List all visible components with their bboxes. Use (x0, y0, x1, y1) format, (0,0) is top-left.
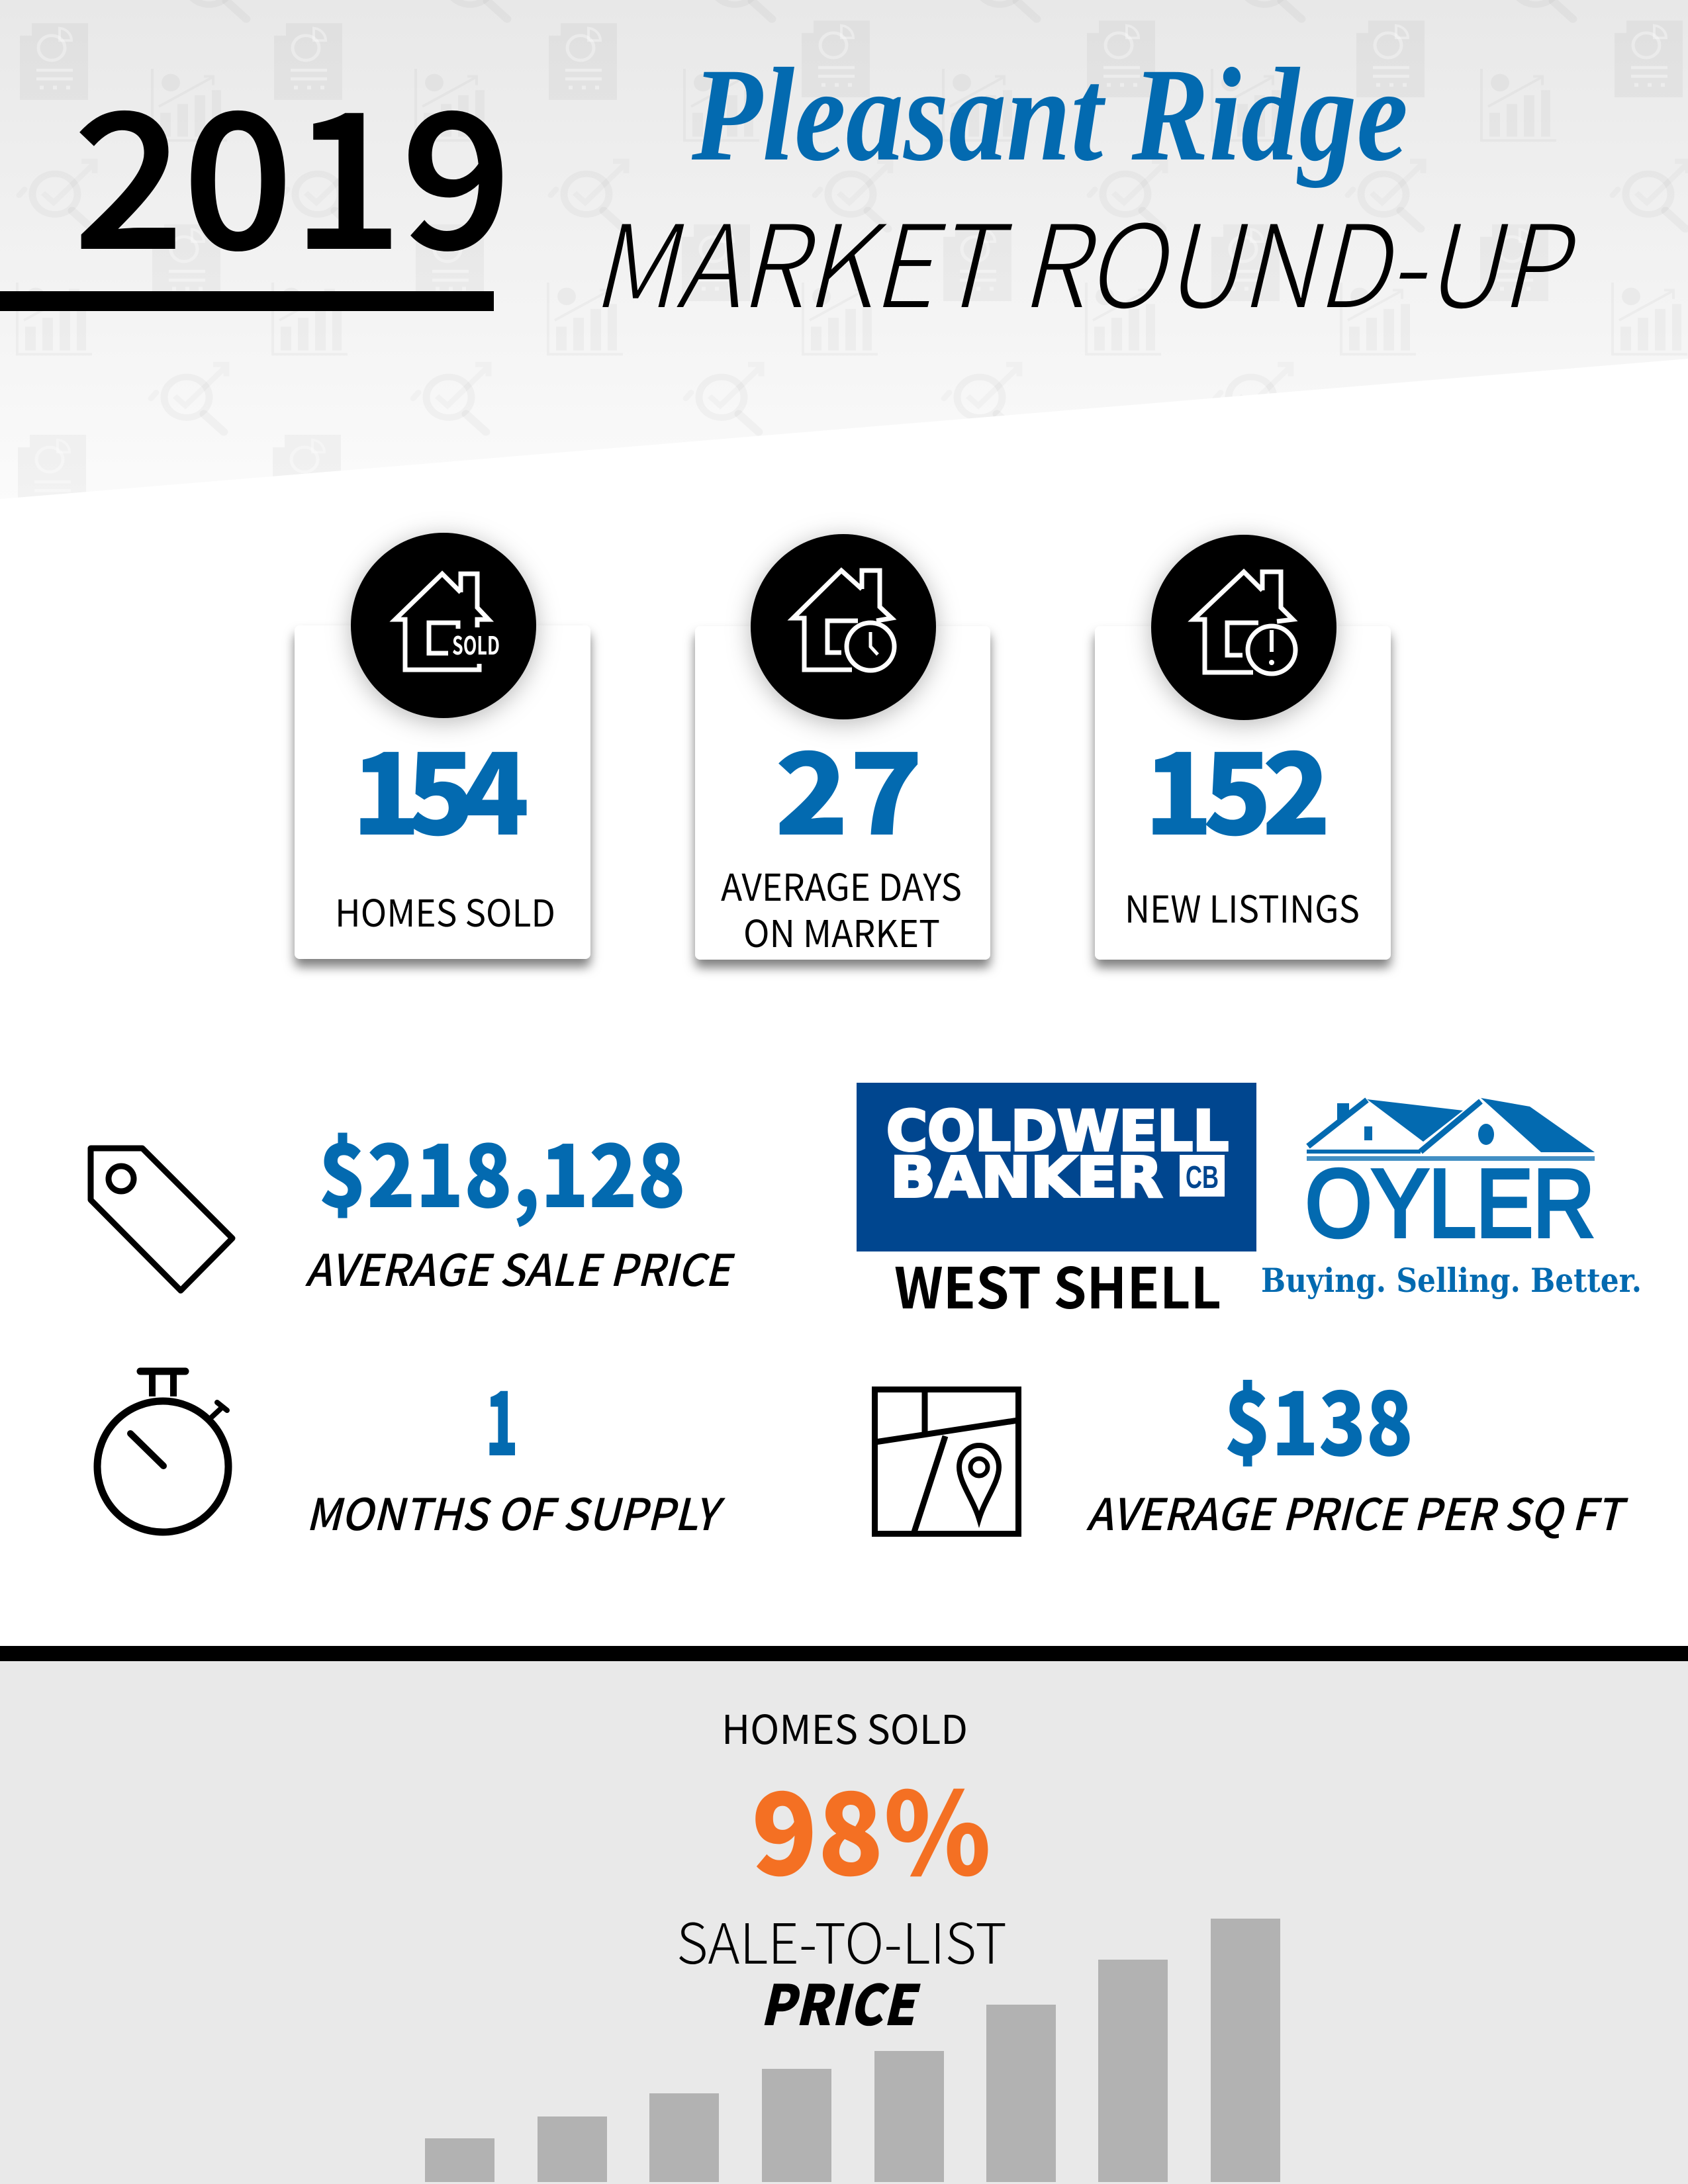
stat: 152: 152 (1144, 702, 1331, 868)
logo: oyler: Buying. Selling. Better. (1261, 1261, 1642, 1300)
icon: stopwatch (97, 1371, 228, 1532)
label: average price per sq ft: AVERAGE PRICE PER SQ FT (1086, 1480, 1628, 1543)
icon: map with pin (875, 1390, 1018, 1534)
icon: sold house (351, 533, 536, 718)
label: homes sold: HOMES SOLD (335, 884, 555, 938)
card: new listings (1095, 535, 1391, 960)
logo: coldwell banker west shell: WEST SHELL (894, 1244, 1221, 1325)
logo: coldwell banker west shell: BANKER (890, 1145, 1162, 1210)
stat: average sale price: $218,128 (318, 1107, 686, 1233)
label: average days on market (721, 858, 962, 958)
panel: sale-to-list (0, 1646, 1688, 2184)
subtitle: market round-up: MARKET ROUND-UP (591, 175, 1579, 340)
stat: average price per sq ft (1086, 1353, 1628, 1543)
stat: 154: 154 (352, 702, 530, 868)
stat: months of supply (306, 1353, 726, 1543)
stat: 98 percent: 98% (751, 1743, 991, 1908)
icon: house with alert (1151, 535, 1336, 720)
logo: coldwell banker west shell: CB (1186, 1160, 1219, 1195)
bar chart (425, 1919, 1280, 2182)
logo: oyler (1261, 1098, 1642, 1300)
label: average days on market: ON MARKET (743, 905, 940, 958)
label: price: PRICE (760, 1962, 921, 2042)
stat: average price per sq ft: $138 (1224, 1353, 1413, 1481)
icon: house with clock (751, 534, 936, 719)
label: average sale price: AVERAGE SALE PRICE (305, 1236, 735, 1299)
label: average days on market: AVERAGE DAYS (721, 858, 962, 912)
icon: sold house: SOLD (452, 625, 500, 662)
logo: oyler: OYLER (1305, 1150, 1595, 1257)
label: homes sold: HOMES SOLD (722, 1698, 968, 1756)
card: days on market (695, 534, 990, 960)
icon: price tag (91, 1148, 232, 1291)
title: Pleasant Ridge: Pleasant Ridge (691, 40, 1408, 189)
stat: 27: 27 (774, 702, 923, 868)
header background (0, 0, 1688, 596)
logo: coldwell banker west shell: COLDWELL (886, 1099, 1229, 1163)
stat: months of supply: 1 (485, 1353, 518, 1481)
card: homes sold (295, 533, 590, 959)
logo: coldwell banker west shell (857, 1083, 1256, 1325)
stat: average sale price (305, 1107, 735, 1299)
label: sale-to-list: SALE-TO-LIST (677, 1900, 1007, 1980)
year 2019: 2019 (74, 32, 511, 301)
label: months of supply: MONTHS OF SUPPLY (306, 1480, 726, 1543)
year underline (0, 291, 494, 311)
label: new listings: NEW LISTINGS (1125, 880, 1360, 934)
